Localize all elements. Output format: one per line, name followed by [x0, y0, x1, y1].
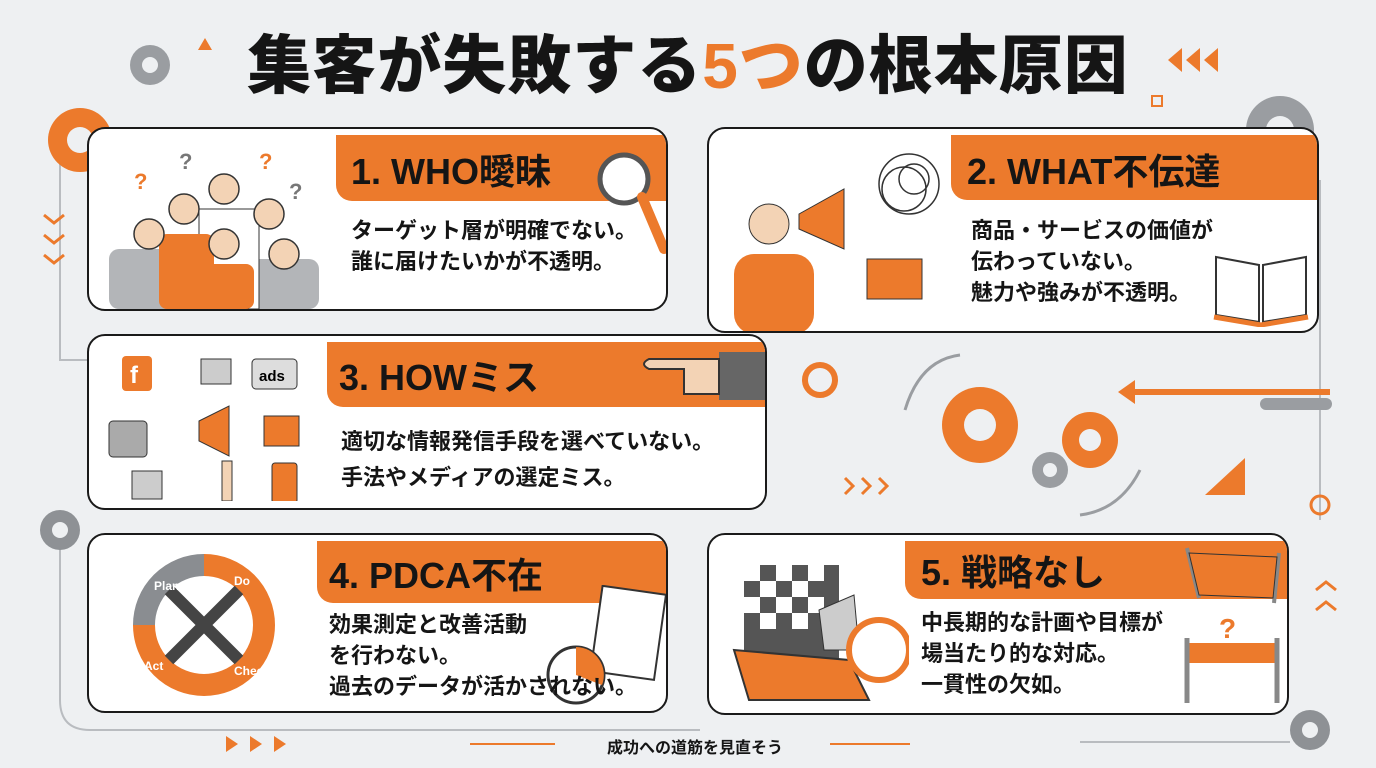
illustration: PDCA cycle crossed: Plan [154, 579, 179, 593]
icon: stopwatch and report [546, 585, 666, 704]
text 1: ターゲット層が明確でない。 [351, 218, 637, 243]
panel: 2 WHAT: 2. WHAT不伝達 [967, 151, 1220, 192]
illustration: people: ? [179, 149, 192, 174]
illustration: people: ? [289, 179, 302, 204]
panel: 5 strategy [707, 533, 1289, 715]
text 2: 伝わっていない。 [971, 249, 1146, 274]
panel: 2 WHAT [707, 127, 1319, 333]
text 1: 誰に届けたいかが不透明。 [351, 249, 615, 274]
illustration: people [109, 149, 319, 309]
header 4 [317, 541, 666, 603]
panel: 1 WHO: 1. WHO曖昧 [351, 151, 551, 192]
panel: 4 PDCA [87, 533, 668, 713]
illustration: PDCA cycle crossed: Do [234, 574, 250, 588]
text 3 [341, 429, 714, 490]
icon: magnifier [598, 152, 666, 254]
text 1 [351, 218, 637, 274]
illustration: media icons: ads [259, 368, 285, 385]
title: 集客が失敗する5つの根本原因 [247, 30, 1129, 102]
icon: pointing hand [643, 352, 765, 400]
header 2 [951, 135, 1317, 200]
text 5: 中長期的な計画や目標が [921, 610, 1163, 635]
header 1 [336, 135, 666, 201]
text 4: を行わない。 [329, 643, 461, 668]
header 3 [327, 342, 767, 407]
text 2 [971, 218, 1213, 305]
text 5: 場当たり的な対応。 [921, 641, 1119, 666]
footer text: 成功への道筋を見直そう [607, 740, 783, 757]
text 2: 商品・サービスの価値が [971, 218, 1213, 243]
panel: 5 strategy: 5. 戦略なし [921, 552, 1105, 593]
panel: 3 HOW [87, 334, 767, 510]
text 3: 手法やメディアの選定ミス。 [341, 465, 625, 490]
illustration: PDCA cycle crossed [133, 554, 275, 696]
text 4: 効果測定と改善活動 [329, 612, 527, 637]
illustration: media icons: f [130, 362, 139, 389]
text 2: 魅力や強みが不透明。 [971, 280, 1191, 305]
text 5: 一貫性の欠如。 [921, 672, 1075, 697]
illustration: PDCA cycle crossed: Check [234, 664, 270, 678]
illustration: megaphone man [734, 153, 940, 331]
illustration: people: ? [134, 169, 147, 194]
panel: 4 PDCA: 4. PDCA不在 [329, 555, 543, 596]
icon: open book [1214, 256, 1308, 327]
text 4: 過去のデータが活かされない。 [329, 674, 637, 699]
panel: 1 WHO [87, 127, 668, 311]
header 5 [905, 541, 1287, 599]
illustration: PDCA cycle crossed: Act [144, 659, 163, 673]
panel: 3 HOW: 3. HOWミス [339, 357, 539, 398]
text 3: 適切な情報発信手段を選べていない。 [341, 429, 714, 454]
illustration: people: ? [259, 149, 272, 174]
text 5 [921, 610, 1163, 697]
illustration: media icons [108, 356, 300, 501]
icon: torn flag and barrier [1184, 548, 1281, 703]
icon: torn flag and barrier: ? [1219, 613, 1236, 644]
text 4 [329, 612, 637, 699]
illustration: chessboard ship compass [732, 565, 909, 701]
